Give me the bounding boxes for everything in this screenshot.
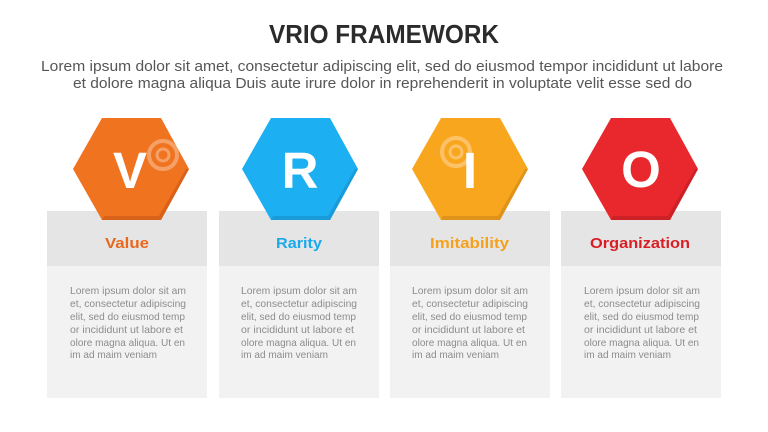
panel: imitability — [390, 118, 550, 398]
icon: hexagon V — [73, 118, 189, 220]
body text: olore magna aliqua. Ut en — [241, 337, 356, 349]
icon: hexagon O — [582, 118, 698, 220]
body text: olore magna aliqua. Ut en — [70, 337, 185, 349]
title: VRIO FRAMEWORK — [269, 19, 499, 49]
body text: et, consectetur adipiscing — [412, 298, 528, 310]
panel body — [390, 266, 550, 398]
body text: or incididunt ut labore et — [412, 324, 525, 336]
icon: hexagon I — [412, 118, 528, 220]
body text — [412, 285, 528, 361]
body text: or incididunt ut labore et — [70, 324, 183, 336]
body text: Lorem ipsum dolor sit am — [70, 285, 186, 297]
heading: Value — [105, 235, 149, 252]
panel header — [390, 211, 550, 266]
panel header — [47, 211, 207, 266]
body text: im ad maim veniam — [412, 349, 499, 361]
body text: et, consectetur adipiscing — [584, 298, 700, 310]
heading: Organization — [590, 235, 690, 252]
body text: et, consectetur adipiscing — [241, 298, 357, 310]
body text: olore magna aliqua. Ut en — [584, 337, 699, 349]
panel body — [561, 266, 721, 398]
body text: im ad maim veniam — [241, 349, 328, 361]
panel body — [47, 266, 207, 398]
body text — [584, 285, 700, 361]
body text: im ad maim veniam — [70, 349, 157, 361]
icon: hexagon R — [242, 118, 358, 220]
icon: hexagon O: O — [621, 141, 661, 198]
icon: hexagon I: I — [463, 142, 477, 199]
body text — [241, 285, 357, 361]
subtitle: Lorem ipsum dolor sit amet, consectetur adipiscing elit, sed do eiusmod tempor incididunt ut labore — [41, 59, 723, 75]
body text: Lorem ipsum dolor sit am — [241, 285, 357, 297]
subtitle — [41, 59, 723, 92]
body text — [70, 285, 186, 361]
body text: elit, sed do eiusmod temp — [412, 311, 527, 323]
panel: rarity — [219, 118, 379, 398]
body text: elit, sed do eiusmod temp — [241, 311, 356, 323]
body text: et, consectetur adipiscing — [70, 298, 186, 310]
body text: or incididunt ut labore et — [241, 324, 354, 336]
body text: Lorem ipsum dolor sit am — [412, 285, 528, 297]
body text: elit, sed do eiusmod temp — [584, 311, 699, 323]
panel header — [561, 211, 721, 266]
panel header — [219, 211, 379, 266]
body text: olore magna aliqua. Ut en — [412, 337, 527, 349]
body text: Lorem ipsum dolor sit am — [584, 285, 700, 297]
panel: organization — [561, 118, 721, 398]
panel: value — [47, 118, 207, 398]
body text: or incididunt ut labore et — [584, 324, 697, 336]
heading: Imitability — [430, 235, 510, 252]
subtitle: et dolore magna aliqua Duis aute irure dolor in reprehenderit in voluptate velit esse sed do — [73, 76, 692, 92]
body text: elit, sed do eiusmod temp — [70, 311, 185, 323]
icon: hexagon V: V — [113, 142, 147, 199]
heading: Rarity — [276, 235, 323, 252]
panel body — [219, 266, 379, 398]
body text: im ad maim veniam — [584, 349, 671, 361]
icon: hexagon R: R — [282, 142, 318, 199]
